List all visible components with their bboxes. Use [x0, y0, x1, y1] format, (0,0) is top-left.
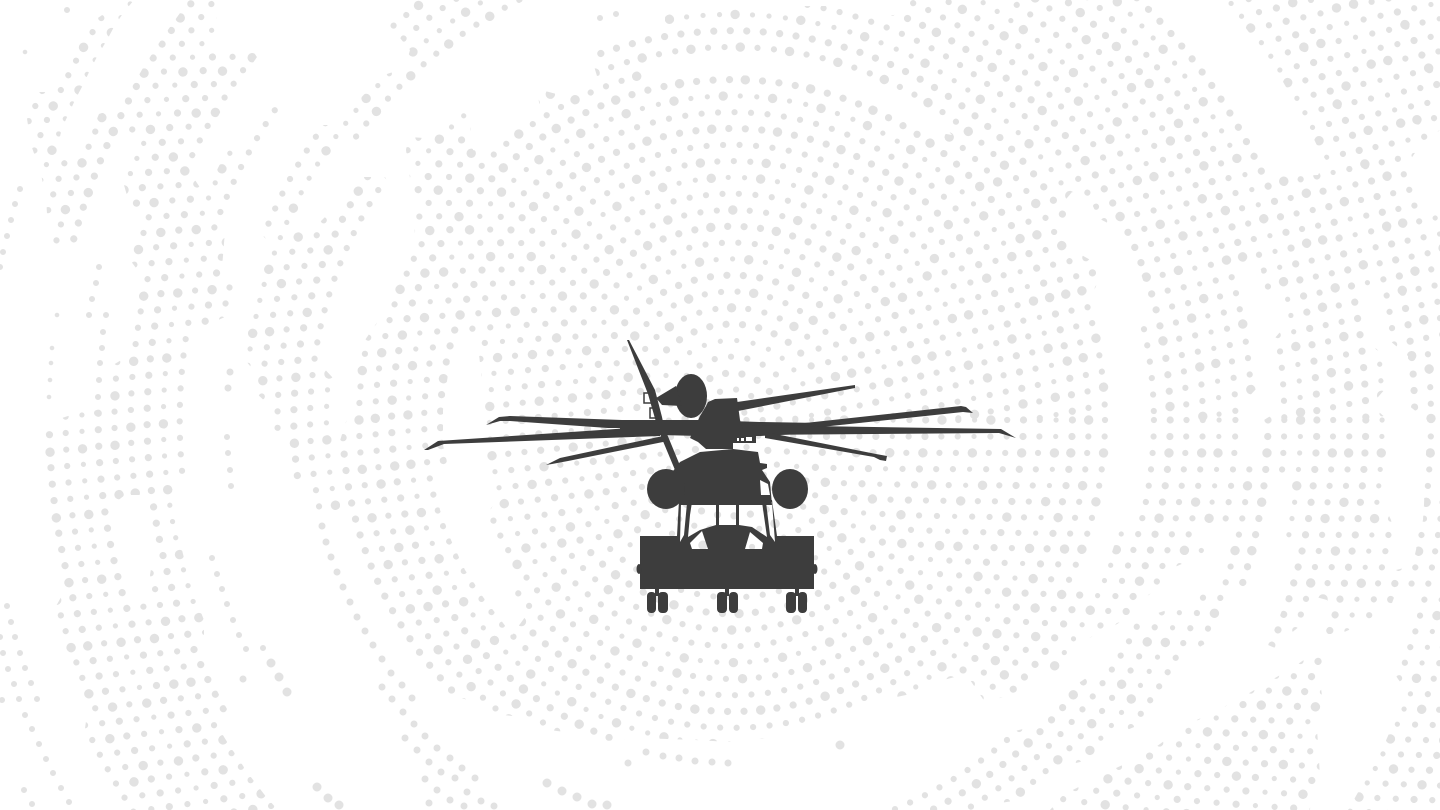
- centre landing gear: [717, 588, 738, 613]
- isolated dots and thin dotted arcs: [0, 10, 840, 806]
- helicopter silhouette: [424, 340, 1016, 613]
- rotor blades: [424, 340, 1016, 470]
- right landing gear: [786, 588, 807, 613]
- left engine pod: [647, 469, 685, 509]
- side bumps: [636, 564, 642, 574]
- rotor head and dome: [656, 374, 745, 449]
- hub spacers with small openings: [733, 436, 756, 443]
- gearbox and engine hump: [670, 449, 772, 505]
- left landing gear: [647, 588, 668, 613]
- right engine pod: [772, 469, 808, 509]
- blade hinge brackets: [644, 393, 658, 418]
- fuselage and cockpit with window panes: [640, 500, 814, 589]
